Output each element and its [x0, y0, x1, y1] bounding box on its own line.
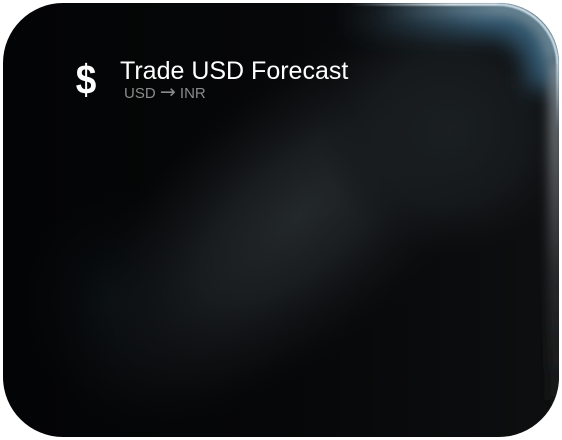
title: Trade USD Forecast — [120, 57, 348, 85]
subtitle: currency pair: USD → INR — [124, 81, 206, 103]
icon: dollar sign: $ — [76, 56, 96, 103]
card edge highlight — [350, 4, 558, 130]
